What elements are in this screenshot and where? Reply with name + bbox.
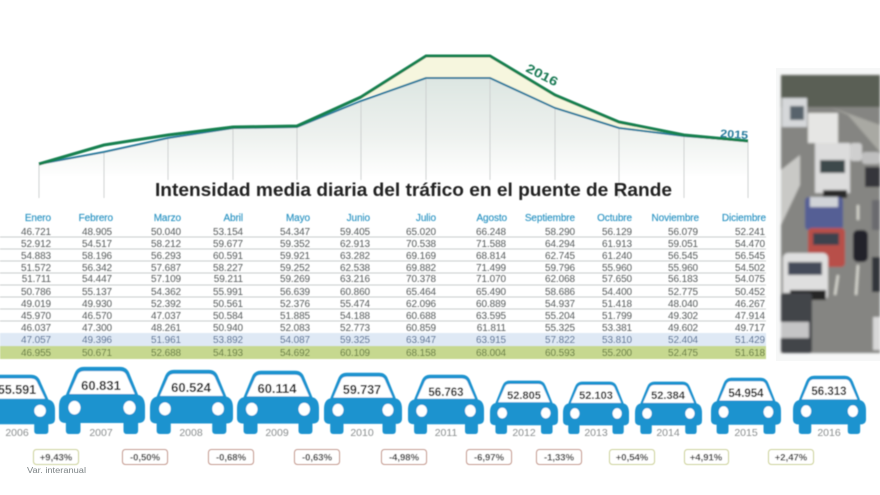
row 2013: 54.188 <box>340 311 371 322</box>
row 2016: 68.158 <box>406 348 437 359</box>
badge -0,68%: -0,68% <box>216 452 247 464</box>
badge -0,63%: -0,63% <box>302 452 333 464</box>
row 2016: 60.109 <box>340 348 371 359</box>
badge -0,50% <box>122 450 168 464</box>
row 2010: 71.070 <box>476 274 507 285</box>
row 2008: 69.169 <box>406 251 437 262</box>
row 2012: 51.418 <box>602 299 633 310</box>
row 2015: 51.961 <box>151 335 182 346</box>
row 2010: 54.075 <box>735 274 766 285</box>
highlighted row backgrounds <box>0 333 766 359</box>
row 2008: 68.814 <box>476 251 507 262</box>
row 2014: 46.037 <box>21 323 52 334</box>
row 2012: 46.267 <box>735 299 766 310</box>
row 2009: 69.882 <box>406 263 437 274</box>
badge -1,33%: -1,33% <box>544 452 575 464</box>
row 2006: 58.290 <box>545 227 576 238</box>
row 2007: 59.677 <box>213 239 244 250</box>
row 2013: 50.584 <box>213 311 244 322</box>
row 2015: 63.947 <box>406 335 437 346</box>
row 2011: 65.464 <box>406 287 437 298</box>
car pictogram 2008 <box>150 370 233 439</box>
row 2012: 62.096 <box>406 299 437 310</box>
row 2010 <box>22 274 766 285</box>
month headers: Marzo <box>154 213 182 224</box>
row 2012: 54.937 <box>545 299 576 310</box>
row 2011: 56.639 <box>280 287 311 298</box>
badge +0,54% <box>610 450 654 464</box>
row 2006: 54.347 <box>280 227 311 238</box>
car pictogram 2016: 56.313 <box>811 386 847 398</box>
row 2007: 64.294 <box>545 239 576 250</box>
row 2012 <box>21 299 766 310</box>
row 2009: 58.227 <box>213 263 244 274</box>
car pictogram 2013: 2013 <box>584 427 608 439</box>
row 2011: 55.991 <box>213 287 244 298</box>
badge -4,98%: -4,98% <box>389 452 420 464</box>
row 2012: 52.392 <box>151 299 182 310</box>
month headers: Abril <box>223 213 243 224</box>
row 2008: 56.545 <box>668 251 699 262</box>
car pictogram 2008: 2008 <box>179 427 203 439</box>
row 2011: 65.490 <box>476 287 507 298</box>
row 2014: 55.325 <box>545 323 576 334</box>
row 2008: 58.196 <box>82 251 113 262</box>
month headers <box>25 213 767 224</box>
row 2009: 51.572 <box>21 263 52 274</box>
row 2016: 50.671 <box>82 348 113 359</box>
row 2016 <box>21 348 766 359</box>
row 2012: 49.930 <box>82 299 113 310</box>
row 2014: 60.859 <box>406 323 437 334</box>
row 2014: 49.602 <box>668 323 699 334</box>
badge +9,43%: +9,43% <box>40 452 73 464</box>
row 2014: 50.940 <box>213 323 244 334</box>
month headers: Diciembre <box>722 213 767 224</box>
row 2016: 60.593 <box>545 348 576 359</box>
car pictogram 2010: 59.737 <box>343 383 381 397</box>
row 2015: 63.915 <box>476 335 507 346</box>
car pictogram 2006 <box>0 375 55 439</box>
badge -1,33% <box>536 450 582 464</box>
row 2009: 56.342 <box>82 263 113 274</box>
row 2007: 58.212 <box>151 239 182 250</box>
car pictogram 2011: 56.763 <box>428 387 464 399</box>
row 2013: 60.688 <box>406 311 437 322</box>
row 2016: 52.688 <box>151 348 182 359</box>
car pictogram 2013 <box>563 382 629 439</box>
row 2009: 59.252 <box>280 263 311 274</box>
row 2010: 59.211 <box>214 274 244 285</box>
row 2010: 54.447 <box>82 274 113 285</box>
row 2011: 50.786 <box>21 287 52 298</box>
row 2008: 54.883 <box>21 251 52 262</box>
row 2011: 50.452 <box>735 287 766 298</box>
row 2006: 65.020 <box>406 227 437 238</box>
row 2007: 71.588 <box>476 239 507 250</box>
row 2015: 57.822 <box>545 335 576 346</box>
month gridlines <box>39 78 748 198</box>
row 2014: 47.300 <box>82 323 113 334</box>
row 2014: 52.083 <box>280 323 311 334</box>
month headers: Julio <box>416 213 437 224</box>
month headers: Febrero <box>79 213 114 224</box>
row 2011: 60.860 <box>340 287 371 298</box>
row 2016: 54.193 <box>213 348 244 359</box>
row 2013: 49.302 <box>668 311 699 322</box>
row 2014: 48.261 <box>151 323 182 334</box>
car pictogram 2008: 60.524 <box>171 380 212 395</box>
row 2015: 53.892 <box>213 335 244 346</box>
row 2013: 63.595 <box>476 311 507 322</box>
car pictogram 2009: 2009 <box>265 427 289 439</box>
car pictogram 2015: 2015 <box>734 427 758 439</box>
badge +4,91%: +4,91% <box>690 452 723 464</box>
row 2013: 46.570 <box>82 311 113 322</box>
month headers: Mayo <box>286 213 311 224</box>
row 2006: 52.241 <box>735 227 766 238</box>
row 2007: 59.051 <box>668 239 699 250</box>
row 2013: 55.204 <box>545 311 576 322</box>
row 2008: 56.293 <box>151 251 182 262</box>
row 2013: 45.970 <box>21 311 52 322</box>
car pictogram 2011 <box>408 375 484 439</box>
line 2016 <box>39 56 748 164</box>
car pictogram 2015 <box>711 378 781 439</box>
row 2016: 54.692 <box>280 348 311 359</box>
car pictogram 2013: 52.103 <box>579 390 613 402</box>
row 2010: 59.269 <box>280 274 311 285</box>
car pictogram 2009: 60.114 <box>257 381 297 396</box>
car pictogram 2007: 60.831 <box>81 378 121 393</box>
row 2007: 62.913 <box>340 239 371 250</box>
row 2008: 59.921 <box>280 251 311 262</box>
row 2012: 52.376 <box>280 299 311 310</box>
row 2006: 56.079 <box>668 227 699 238</box>
row 2010: 57.109 <box>151 274 182 285</box>
car pictogram 2006: 2006 <box>5 427 29 439</box>
car pictogram 2015: 54.954 <box>728 388 764 400</box>
row 2015: 49.396 <box>82 335 113 346</box>
row 2009: 57.687 <box>151 263 182 274</box>
car pictogram 2010: 2010 <box>350 427 374 439</box>
month headers: Octubre <box>597 213 633 224</box>
row 2007: 70.538 <box>406 239 437 250</box>
month headers: Enero <box>25 213 52 224</box>
row 2011: 52.775 <box>668 287 699 298</box>
row 2010: 62.068 <box>545 274 576 285</box>
row 2006: 48.905 <box>82 227 113 238</box>
row 2013: 51.799 <box>602 311 633 322</box>
row 2012: 49.019 <box>21 299 52 310</box>
badge +9,43% <box>34 450 78 464</box>
badge +2,47% <box>768 450 814 464</box>
row 2011: 58.686 <box>545 287 576 298</box>
photo: traffic jam on the bridge <box>776 68 880 361</box>
row 2009 <box>21 263 766 274</box>
row 2013 <box>21 311 766 322</box>
car pictogram 2012: 2012 <box>512 427 536 439</box>
row 2012: 55.474 <box>340 299 371 310</box>
row 2013: 47.914 <box>735 311 766 322</box>
badge -4,98% <box>382 450 426 464</box>
row 2006: 53.154 <box>213 227 244 238</box>
row 2015 <box>21 335 766 346</box>
row 2009: 55.960 <box>602 263 633 274</box>
row 2008 <box>21 251 766 262</box>
badge -6,97% <box>466 450 512 464</box>
month headers: Junio <box>347 213 371 224</box>
car pictogram 2007 <box>59 367 145 439</box>
car pictogram 2009 <box>237 371 319 439</box>
row 2016: 51.618 <box>735 348 766 359</box>
row 2012: 60.889 <box>476 299 507 310</box>
row 2016: 55.200 <box>602 348 633 359</box>
area fill below 2015 line <box>39 78 748 198</box>
car pictogram 2014: 52.384 <box>651 390 686 402</box>
data table <box>0 213 767 359</box>
note: year-on-year variation: Var. interanual <box>27 466 86 475</box>
row 2015: 54.087 <box>280 335 311 346</box>
line chart: monthly traffic 2015 vs 2016 <box>39 56 749 198</box>
row 2006: 46.721 <box>21 227 52 238</box>
car pictogram 2010 <box>324 373 402 439</box>
row 2011: 55.137 <box>82 287 113 298</box>
row 2012: 50.561 <box>213 299 244 310</box>
row 2009: 62.538 <box>340 263 371 274</box>
row 2010: 63.216 <box>340 274 371 285</box>
row 2009: 59.796 <box>545 263 576 274</box>
row 2008: 63.282 <box>340 251 371 262</box>
row 2013: 51.885 <box>280 311 311 322</box>
row 2006: 50.040 <box>151 227 182 238</box>
row 2009: 71.499 <box>476 263 507 274</box>
row 2006: 56.129 <box>602 227 633 238</box>
row 2006 <box>21 227 766 238</box>
row 2014: 52.773 <box>340 323 371 334</box>
row 2014 <box>21 323 766 334</box>
row 2008: 56.545 <box>735 251 766 262</box>
car pictogram 2012: 52.805 <box>507 390 541 402</box>
row 2009: 54.502 <box>735 263 766 274</box>
month headers: Agosto <box>476 213 508 224</box>
row 2012: 48.040 <box>668 299 699 310</box>
row 2006: 59.405 <box>340 227 371 238</box>
badge +0,54%: +0,54% <box>616 452 649 464</box>
row 2015: 51.429 <box>735 335 766 346</box>
title: Intensidad media diaria del tráfico en el puente de Rande <box>155 180 672 200</box>
line 2015 <box>39 78 748 164</box>
row 2015: 47.057 <box>21 335 52 346</box>
badge -0,63% <box>294 450 340 464</box>
row 2015: 53.810 <box>602 335 633 346</box>
row 2007: 59.352 <box>280 239 311 250</box>
row 2011: 54.362 <box>151 287 182 298</box>
row 2011: 54.400 <box>602 287 633 298</box>
row 2010: 57.650 <box>602 274 633 285</box>
row 2014: 61.811 <box>477 323 507 334</box>
label 2015: 2015 <box>720 128 749 142</box>
badge -0,50%: -0,50% <box>130 452 161 464</box>
badge +2,47%: +2,47% <box>775 452 808 464</box>
row 2015: 52.404 <box>668 335 699 346</box>
row 2014: 53.381 <box>602 323 633 334</box>
row 2015: 59.325 <box>340 335 371 346</box>
row 2010: 51.711 <box>22 274 52 285</box>
car pictogram 2014 <box>635 382 702 439</box>
row 2009: 55.960 <box>668 263 699 274</box>
row 2007: 61.913 <box>602 239 633 250</box>
month headers: Noviembre <box>652 213 700 224</box>
row 2010: 56.183 <box>668 274 699 285</box>
row 2007: 54.517 <box>82 239 113 250</box>
row 2016: 52.475 <box>668 348 699 359</box>
row 2014: 49.717 <box>735 323 766 334</box>
row 2011 <box>21 287 766 298</box>
badge -0,68% <box>208 450 254 464</box>
label 2016: 2016 <box>524 61 560 89</box>
row 2016: 46.955 <box>21 348 52 359</box>
car pictogram 2012 <box>490 381 558 439</box>
car pictogram 2016 <box>793 376 866 439</box>
band between 2015 and 2016 <box>361 56 684 136</box>
badge +4,91% <box>684 450 728 464</box>
row 2006: 66.248 <box>476 227 507 238</box>
row 2016: 68.004 <box>476 348 507 359</box>
row 2007 <box>21 239 766 250</box>
row 2008: 61.240 <box>602 251 633 262</box>
badge -6,97%: -6,97% <box>474 452 505 464</box>
car pictogram 2016: 2016 <box>817 427 841 439</box>
row 2013: 47.037 <box>151 311 182 322</box>
car pictogram 2007: 2007 <box>89 427 113 439</box>
row 2010: 70.378 <box>406 274 437 285</box>
row 2008: 62.745 <box>545 251 576 262</box>
row 2008: 60.591 <box>213 251 244 262</box>
row 2007: 54.470 <box>735 239 766 250</box>
row 2007: 52.912 <box>21 239 52 250</box>
month headers: Septiembre <box>525 213 576 224</box>
car pictogram 2011: 2011 <box>435 427 457 439</box>
car pictogram 2014: 2014 <box>656 427 680 439</box>
